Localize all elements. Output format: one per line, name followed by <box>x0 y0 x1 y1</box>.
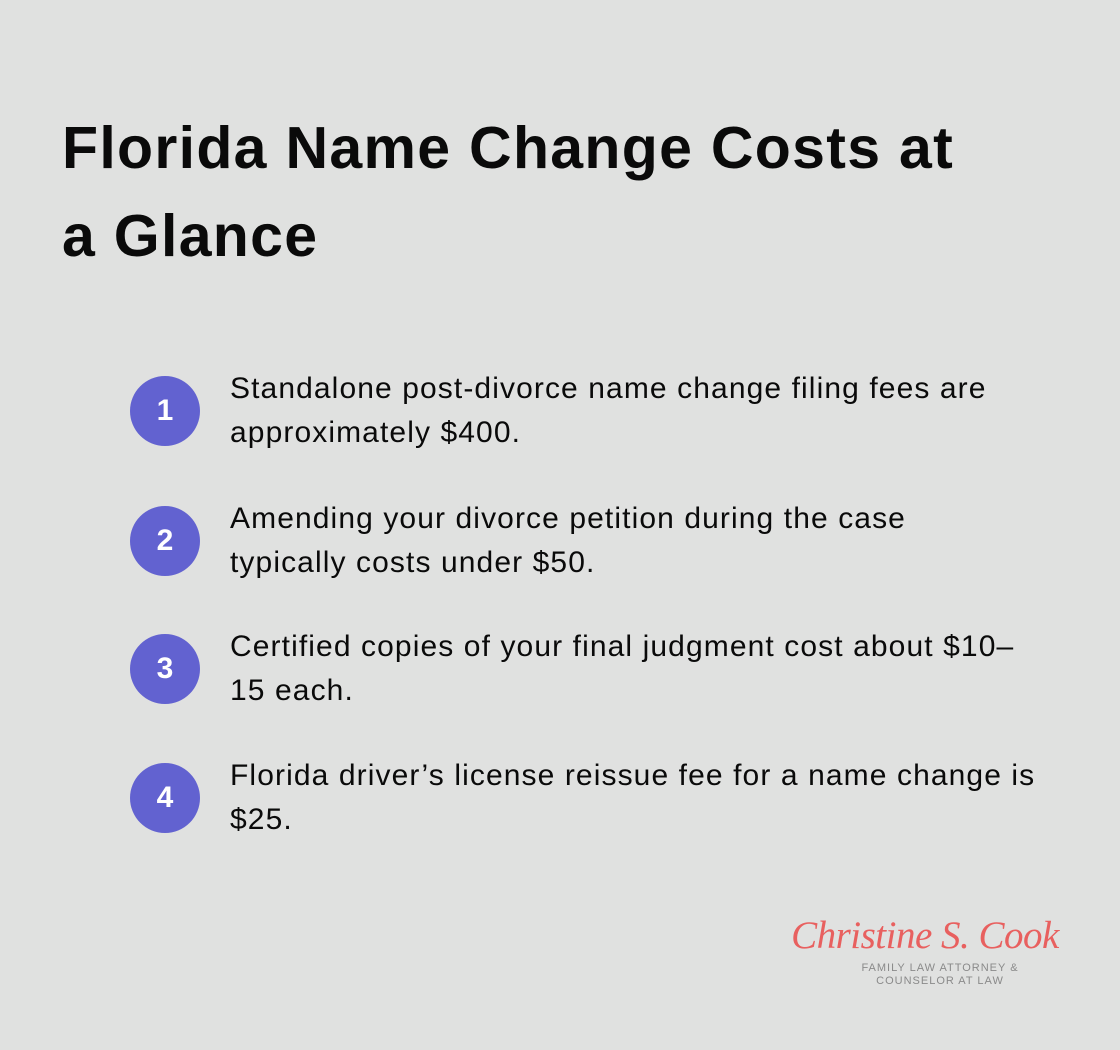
item 2 <box>130 502 906 579</box>
item 3 <box>130 630 1014 707</box>
text 3 <box>230 630 1014 707</box>
badge 1 <box>130 376 200 446</box>
text 1 <box>230 372 987 449</box>
text 3: 15 each. <box>230 674 354 707</box>
logo subtitle: COUNSELOR AT LAW <box>876 975 1004 987</box>
item 1 <box>130 372 987 449</box>
badge 3: 3 <box>157 652 173 685</box>
badge 4: 4 <box>157 781 173 814</box>
badge 3 <box>130 634 200 704</box>
title: Florida Name Change Costs at <box>62 115 954 181</box>
item 4 <box>130 759 1035 836</box>
text 1: approximately $400. <box>230 416 521 449</box>
text 2 <box>230 502 906 579</box>
badge 4 <box>130 763 200 833</box>
logo <box>791 914 1060 987</box>
text 4 <box>230 759 1035 836</box>
text 2: Amending your divorce petition during the case <box>230 502 906 535</box>
title <box>62 115 954 269</box>
text 4: $25. <box>230 803 293 836</box>
text 3: Certified copies of your final judgment cost about $10– <box>230 630 1014 663</box>
text 1: Standalone post-divorce name change filing fees are <box>230 372 987 405</box>
text 4: Florida driver’s license reissue fee for a name change is <box>230 759 1035 792</box>
logo subtitle <box>861 962 1019 987</box>
title: a Glance <box>62 203 318 269</box>
badge 2: 2 <box>157 524 173 557</box>
badge 1: 1 <box>157 394 173 427</box>
badge 2 <box>130 506 200 576</box>
logo script name: Christine S. Cook <box>791 914 1059 957</box>
text 2: typically costs under $50. <box>230 546 595 579</box>
logo subtitle: FAMILY LAW ATTORNEY & <box>861 962 1019 974</box>
